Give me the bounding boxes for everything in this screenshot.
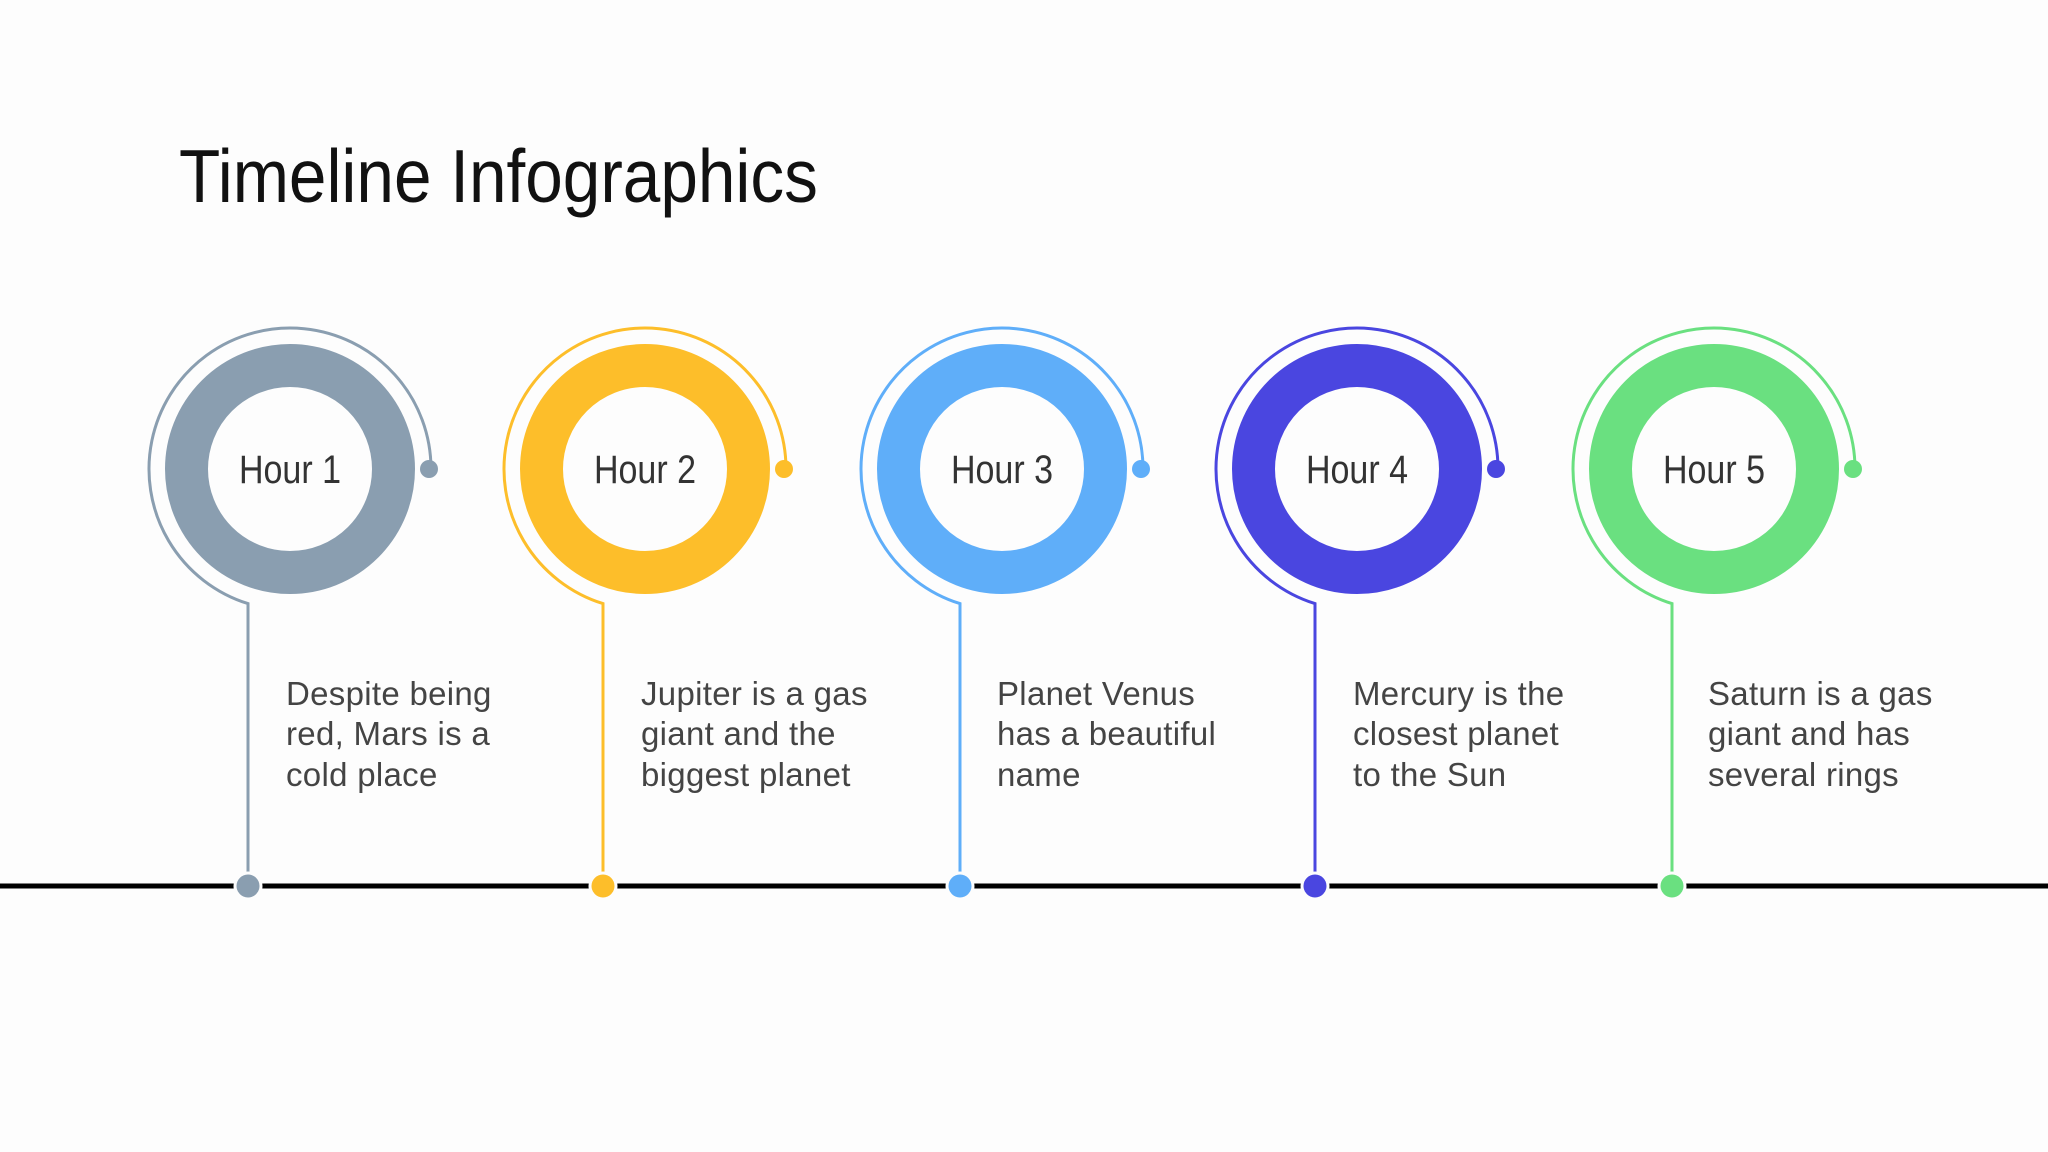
milestone: Hour 2: Jupiter is a gas — [641, 675, 868, 712]
milestone: Hour 4: Hour 4 — [1306, 446, 1408, 492]
text block: Despite being — [286, 675, 492, 712]
milestone: Hour 3 — [861, 328, 1216, 899]
text block: red, Mars is a — [286, 715, 490, 752]
milestone: Hour 4: to the Sun — [1353, 756, 1506, 793]
ring — [186, 366, 394, 572]
text block: cold place — [286, 756, 438, 793]
milestone: Hour 3: Hour 3 — [951, 446, 1053, 492]
milestone: Hour 4 — [1216, 328, 1564, 899]
milestone: Hour 2: biggest planet — [641, 756, 851, 793]
milestone: Hour 4: Mercury is the — [1353, 675, 1564, 712]
milestone: Hour 5: Saturn is a gas — [1708, 675, 1933, 712]
milestone: Hour 2 — [504, 328, 868, 899]
milestone: Hour 5: several rings — [1708, 756, 1899, 793]
milestone: Hour 5: giant and has — [1708, 715, 1910, 752]
milestone: Hour 2: Hour 2 — [594, 446, 696, 492]
milestone: Hour 1: Hour 1 — [239, 446, 341, 492]
milestone: Hour 2: giant and the — [641, 715, 836, 752]
connector arc and line — [149, 328, 431, 886]
milestone: Hour 4: closest planet — [1353, 715, 1559, 752]
timeline axis — [0, 884, 2048, 888]
milestone: Hour 5: Hour 5 — [1663, 446, 1765, 492]
milestone: Hour 1 — [149, 328, 492, 899]
milestone: Hour 3: name — [997, 756, 1081, 793]
milestone: Hour 3: has a beautiful — [997, 715, 1216, 752]
milestone: Hour 3: Planet Venus — [997, 675, 1195, 712]
title: Timeline Infographics — [179, 135, 818, 219]
milestone: Hour 5 — [1573, 328, 1933, 899]
